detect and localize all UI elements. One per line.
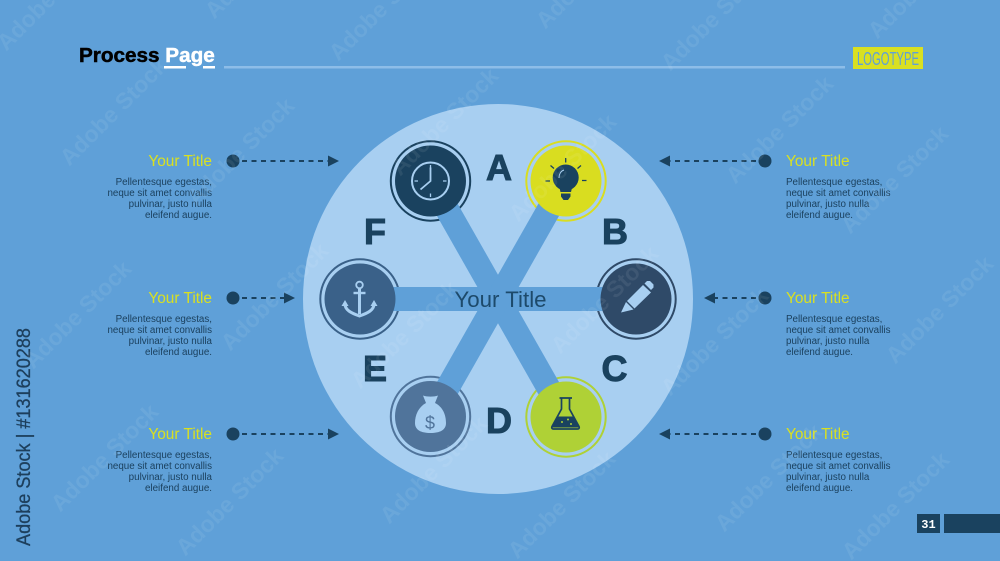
right item 1: pulvinar, justo nulla — [786, 199, 870, 210]
watermarks: Adobe Stock — [545, 240, 663, 358]
node D: money bag: $ — [425, 413, 435, 433]
node B: light bulb — [530, 146, 602, 216]
right item 2: eleifend augue. — [786, 347, 853, 358]
watermarks: Adobe Stock — [655, 282, 773, 400]
right item 2 — [786, 290, 891, 358]
left item 2 — [107, 290, 213, 358]
left item 2: neque sit amet convallis — [107, 325, 212, 336]
left arrow 1 — [226, 154, 339, 168]
left item 3: eleifend augue. — [145, 483, 212, 494]
left item 3: Your Title — [148, 426, 212, 443]
watermarks: Adobe Stock — [502, 445, 620, 561]
header rule — [224, 66, 845, 68]
watermarks: Adobe Stock — [181, 92, 299, 210]
big center circle — [303, 104, 693, 494]
watermarks: Adobe Stock — [720, 70, 838, 188]
connector bands — [385, 204, 610, 394]
node outer rings — [320, 141, 676, 457]
right arrow 1 — [659, 154, 772, 168]
left item 2: eleifend augue. — [145, 347, 212, 358]
page number — [917, 514, 940, 533]
letter C: C — [602, 348, 628, 389]
right item 1 — [786, 153, 891, 221]
letter E: E — [363, 348, 387, 389]
left item 1: Pellentesque egestas, — [116, 177, 212, 188]
watermarks: Adobe Stock — [45, 398, 163, 516]
letter A: A — [486, 147, 512, 188]
logotype: LOGOTYPE — [857, 49, 919, 69]
left arrow 3 — [226, 428, 339, 440]
right item 1: neque sit amet convallis — [786, 188, 891, 199]
right item 1: eleifend augue. — [786, 210, 853, 221]
left item 2: pulvinar, justo nulla — [129, 336, 213, 347]
node C: pencil — [600, 264, 672, 334]
node F: flask — [530, 382, 602, 452]
right item 3: pulvinar, justo nulla — [786, 472, 870, 483]
left item 2: Your Title — [148, 290, 212, 307]
left item 1: neque sit amet convallis — [107, 188, 212, 199]
stock credit: Adobe Stock | #131620288 — [14, 328, 35, 546]
right item 3: neque sit amet convallis — [786, 461, 891, 472]
watermarks: Adobe Stock — [170, 442, 288, 560]
left item 3: neque sit amet convallis — [107, 461, 212, 472]
right arrow 2 — [704, 292, 772, 304]
right item 2: Your Title — [786, 290, 850, 307]
page number: 31 — [921, 518, 936, 532]
right item 3: eleifend augue. — [786, 483, 853, 494]
watermarks: Adobe Stock — [709, 418, 827, 536]
left item 1: pulvinar, justo nulla — [129, 199, 213, 210]
footer bar — [944, 514, 1000, 533]
letter B: B — [602, 211, 628, 252]
right item 2: Pellentesque egestas, — [786, 314, 882, 325]
logotype — [853, 47, 923, 69]
left item 2: Pellentesque egestas, — [116, 314, 212, 325]
left item 3: Pellentesque egestas, — [116, 450, 212, 461]
watermarks: Adobe Stock — [835, 120, 953, 238]
node E: anchor — [324, 264, 396, 334]
right arrow 3 — [659, 428, 772, 440]
node D: money bag — [395, 381, 466, 452]
right item 3: Pellentesque egestas, — [786, 450, 882, 461]
watermarks: Adobe Stock — [374, 410, 492, 528]
right item 2: pulvinar, justo nulla — [786, 336, 870, 347]
right item 2: neque sit amet convallis — [786, 325, 891, 336]
left item 1: Your Title — [148, 153, 212, 170]
left item 1: eleifend augue. — [145, 210, 212, 221]
left item 3: pulvinar, justo nulla — [129, 472, 213, 483]
title: Process Page — [79, 44, 215, 67]
left item 1 — [107, 153, 213, 221]
right item 3: Your Title — [786, 426, 850, 443]
center label: Your Title — [454, 287, 547, 312]
watermarks: Adobe Stock — [345, 275, 463, 393]
watermarks: Adobe Stock — [18, 255, 136, 373]
letter F: F — [364, 211, 386, 252]
node A: clock — [395, 146, 466, 216]
watermarks: Adobe Stock — [836, 446, 954, 561]
letter D: D — [486, 400, 512, 441]
right item 1: Pellentesque egestas, — [786, 177, 882, 188]
left item 3 — [107, 426, 213, 494]
left arrow 2 — [226, 292, 295, 304]
right item 3 — [786, 426, 891, 494]
watermarks: Adobe Stock — [880, 250, 998, 368]
watermarks: Adobe Stock — [503, 108, 621, 226]
watermarks: Adobe Stock — [215, 237, 333, 355]
watermarks: Adobe Stock — [54, 52, 172, 170]
watermarks: Adobe Stock — [385, 62, 503, 180]
right item 1: Your Title — [786, 153, 850, 170]
